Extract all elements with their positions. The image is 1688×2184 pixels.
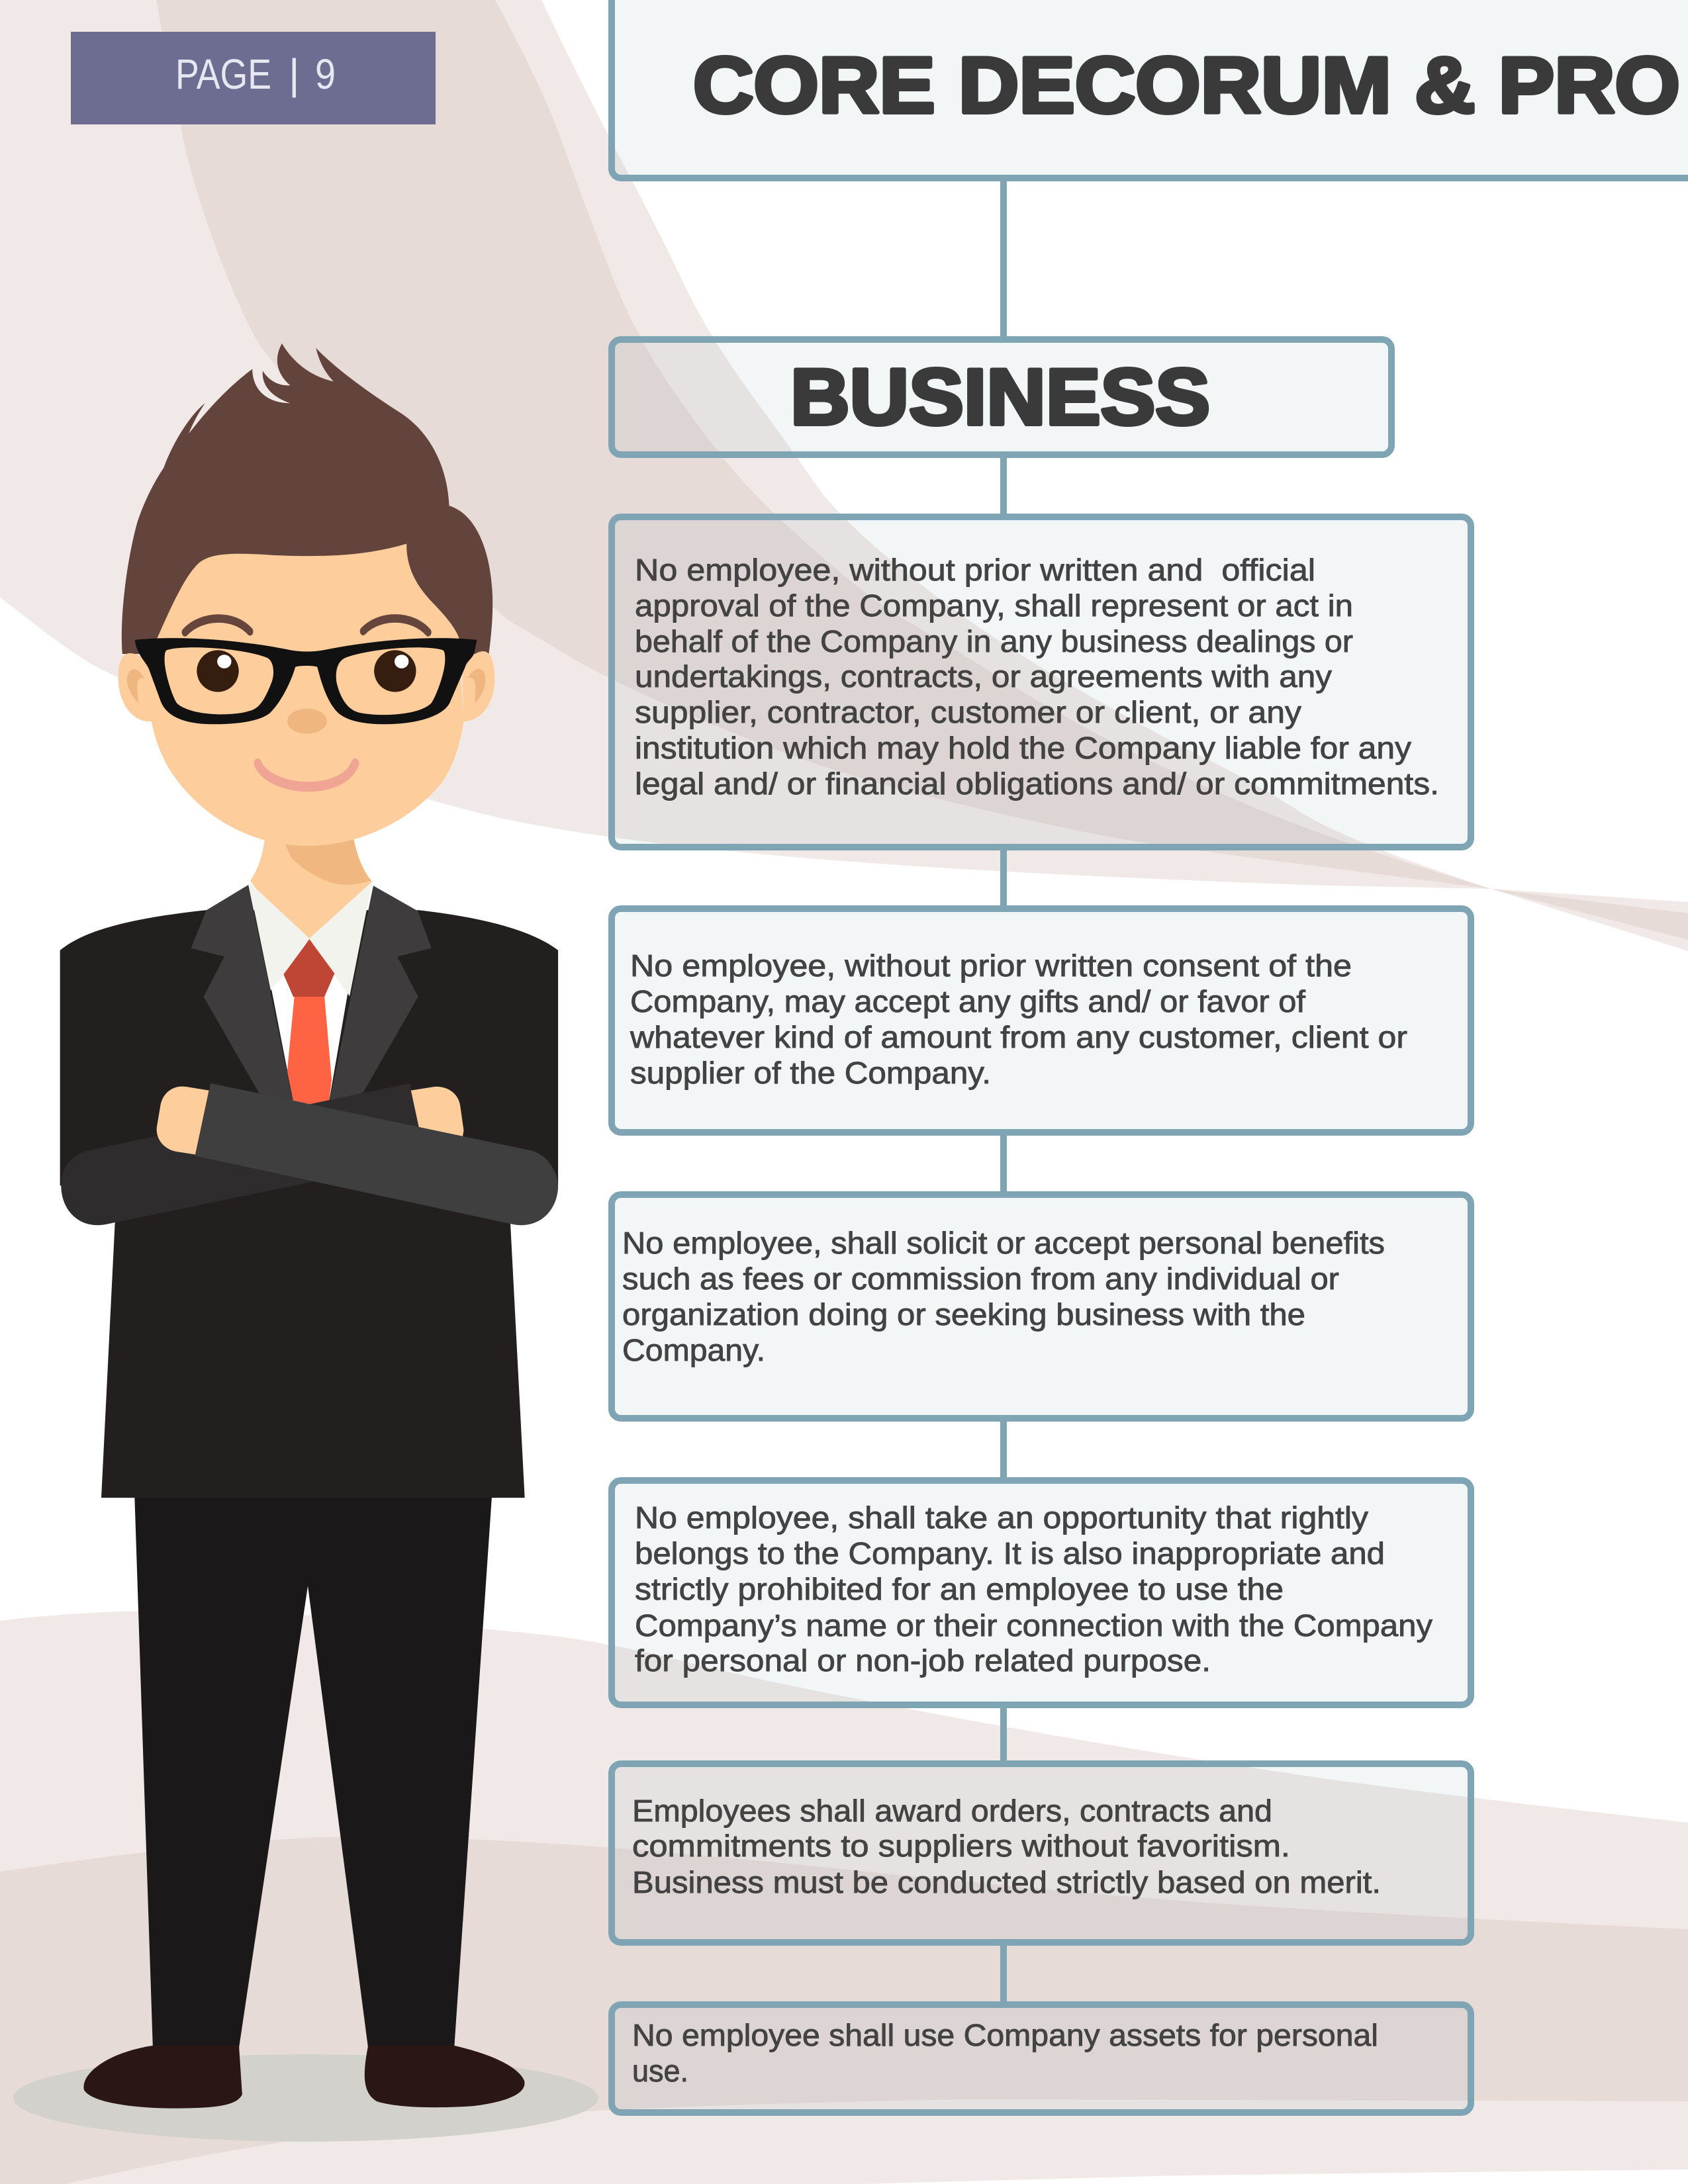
rule box 1: legal and/ or financial obligations and/ or commitments. [635, 766, 1439, 801]
rule box 3 [612, 1195, 1471, 1418]
rule box 5: Business must be conducted strictly based on merit. [632, 1865, 1381, 1899]
rule box 4: No employee, shall take an opportunity that rightly [635, 1500, 1369, 1535]
rule box 4: Company’s name or their connection with the Company [635, 1608, 1433, 1643]
ground shadow [13, 2054, 598, 2142]
page number tag: | [289, 50, 300, 98]
rule box 3: such as fees or commission from any individual or [622, 1261, 1339, 1296]
rule box 3: No employee, shall solicit or accept personal benefits [622, 1226, 1385, 1260]
rule box 1: behalf of the Company in any business dealings or [635, 624, 1353, 659]
rule box 2 [612, 909, 1471, 1132]
rule box 5: Employees shall award orders, contracts and [632, 1794, 1272, 1828]
head with hair, glasses and face [118, 343, 494, 846]
rule box 2: supplier of the Company. [630, 1056, 991, 1090]
background waves: bottom [0, 1611, 1688, 2184]
rule box 5 [612, 1764, 1471, 1942]
background ribbon: top swoosh [0, 0, 1688, 951]
rule box 4 [612, 1480, 1471, 1705]
title box [612, 0, 1688, 178]
rule box 2: whatever kind of amount from any customer, client or [630, 1020, 1407, 1054]
rule box 2: No employee, without prior written consent of the [630, 948, 1352, 983]
rule box 4: for personal or non-job related purpose. [635, 1643, 1211, 1678]
legs and shoes [83, 1496, 524, 2109]
rule box 1: No employee, without prior written and official [635, 553, 1315, 587]
section heading: business [612, 340, 1391, 455]
rule box 2: Company, may accept any gifts and/ or favor of [630, 984, 1305, 1019]
rule box 4: belongs to the Company. It is also inappropriate and [635, 1536, 1385, 1570]
rule box 6: No employee shall use Company assets for personal [632, 2018, 1378, 2052]
torso with jacket, shirt, tie and crossed arms [60, 827, 558, 1498]
rule box 3: Company. [622, 1333, 765, 1367]
rule box 5: commitments to suppliers without favoritism. [632, 1829, 1290, 1863]
rule box 1: approval of the Company, shall represent or act in [635, 588, 1353, 623]
businessman character [13, 343, 598, 2142]
rule box 6 [612, 2005, 1471, 2113]
rule box 4: strictly prohibited for an employee to use the [635, 1572, 1284, 1606]
rule box 6: use. [632, 2054, 688, 2088]
rule box 1: supplier, contractor, customer or client, or any [635, 695, 1302, 729]
section heading: business: BUSINESS [790, 353, 1210, 441]
rule box 1: institution which may hold the Company liable for any [635, 731, 1412, 765]
title box: CORE DECORUM & PRO [693, 41, 1680, 130]
page number tag [71, 32, 436, 124]
rule box 1: undertakings, contracts, or agreements with any [635, 659, 1333, 694]
rule box 3: organization doing or seeking business with the [622, 1297, 1305, 1332]
rule box 1 [612, 517, 1471, 847]
page number tag: 9 [315, 50, 336, 98]
page number tag: PAGE [175, 50, 271, 98]
connector lines [1000, 179, 1007, 2005]
